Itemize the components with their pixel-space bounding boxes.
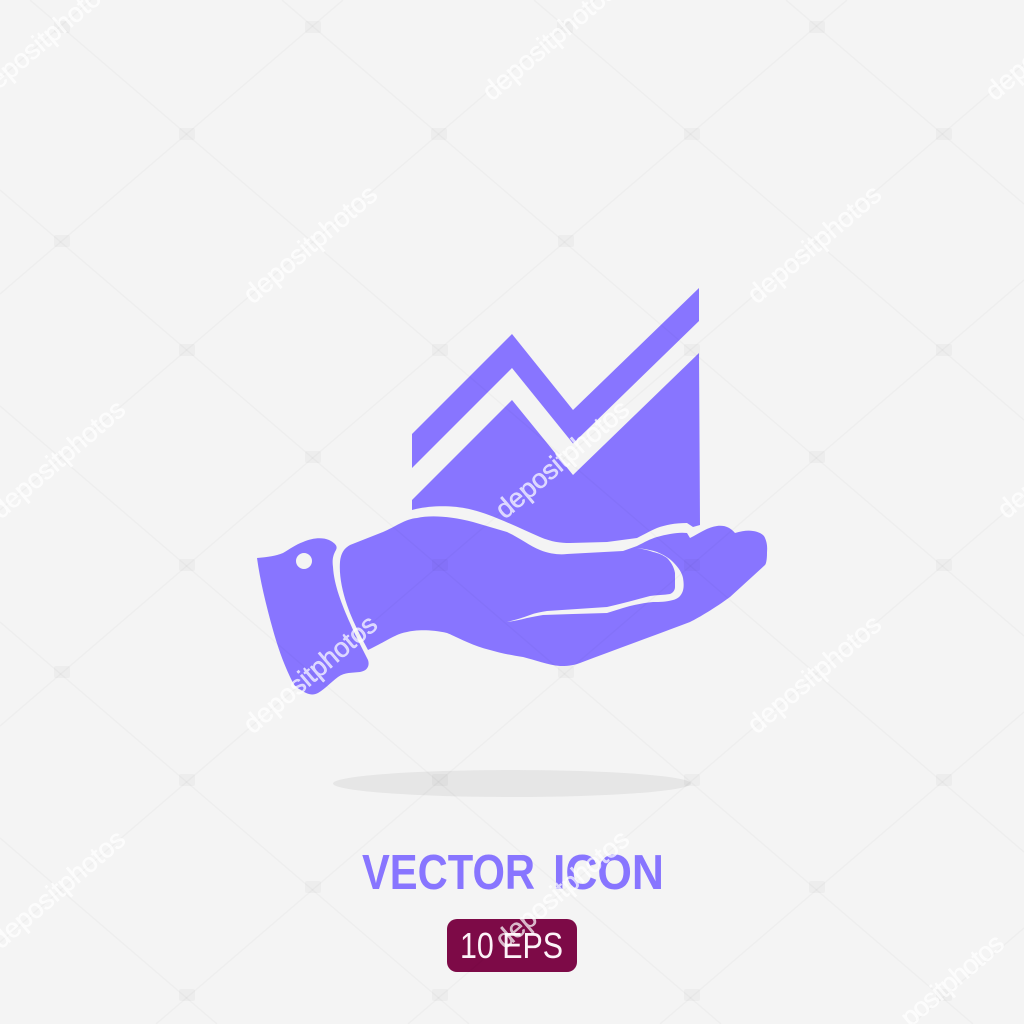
title: ICON <box>553 846 664 900</box>
hand: palm and fingers <box>340 516 767 666</box>
watermark text: depositphotos <box>237 609 383 739</box>
hand: shirt cuff with button <box>257 538 369 694</box>
watermark text: depositphotos <box>489 824 635 954</box>
hand: finger outline <box>507 548 684 622</box>
watermark text: depositphotos <box>741 179 887 309</box>
title <box>362 846 664 900</box>
watermark text: depositphotos <box>741 609 887 739</box>
chart: solid area <box>412 353 700 543</box>
chart: upper trend band <box>412 288 699 468</box>
icon: hand holding rising chart <box>257 288 767 694</box>
watermark text: depositphotos <box>237 179 383 309</box>
shadow beneath the hand <box>333 770 691 797</box>
badge: 10 EPS: 10 EPS <box>460 925 563 966</box>
title: VECTOR <box>362 846 535 900</box>
watermark text: depositphotos <box>489 394 635 524</box>
badge: 10 EPS <box>447 919 577 972</box>
